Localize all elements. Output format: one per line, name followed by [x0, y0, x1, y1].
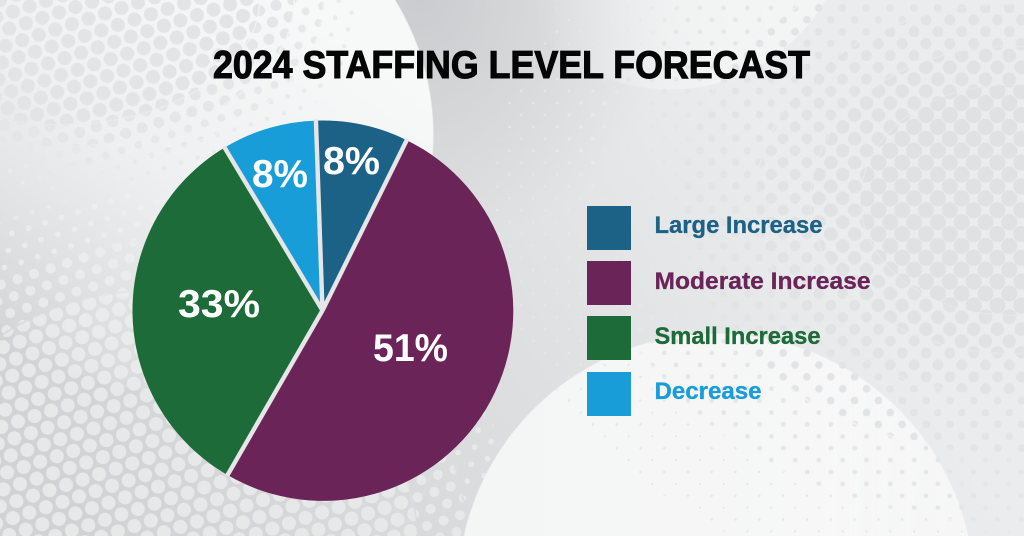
slice: moderate increase 51% [228, 140, 513, 501]
title: 2024 STAFFING LEVEL FORECAST [213, 44, 810, 87]
legend swatch: moderate increase [587, 261, 631, 305]
label: 33%: 33% [178, 283, 260, 326]
slice: decrease 8% [225, 121, 322, 310]
legend label: large increase: Large Increase [654, 212, 822, 239]
pie chart [132, 120, 513, 501]
legend [587, 206, 870, 416]
label: 51%: 51% [373, 327, 448, 370]
legend label: decrease: Decrease [654, 378, 762, 405]
legend label: small increase: Small Increase [654, 323, 820, 350]
slice: small increase 33% [132, 148, 322, 475]
legend swatch: small increase [587, 316, 631, 360]
label: 8% large increase: 8% [323, 140, 380, 183]
legend swatch: decrease [587, 372, 631, 416]
label: 8% decrease: 8% [252, 153, 308, 196]
legend swatch: large increase [587, 206, 631, 250]
slice: large increase 8% [316, 120, 407, 310]
legend label: moderate increase: Moderate Increase [654, 268, 870, 295]
